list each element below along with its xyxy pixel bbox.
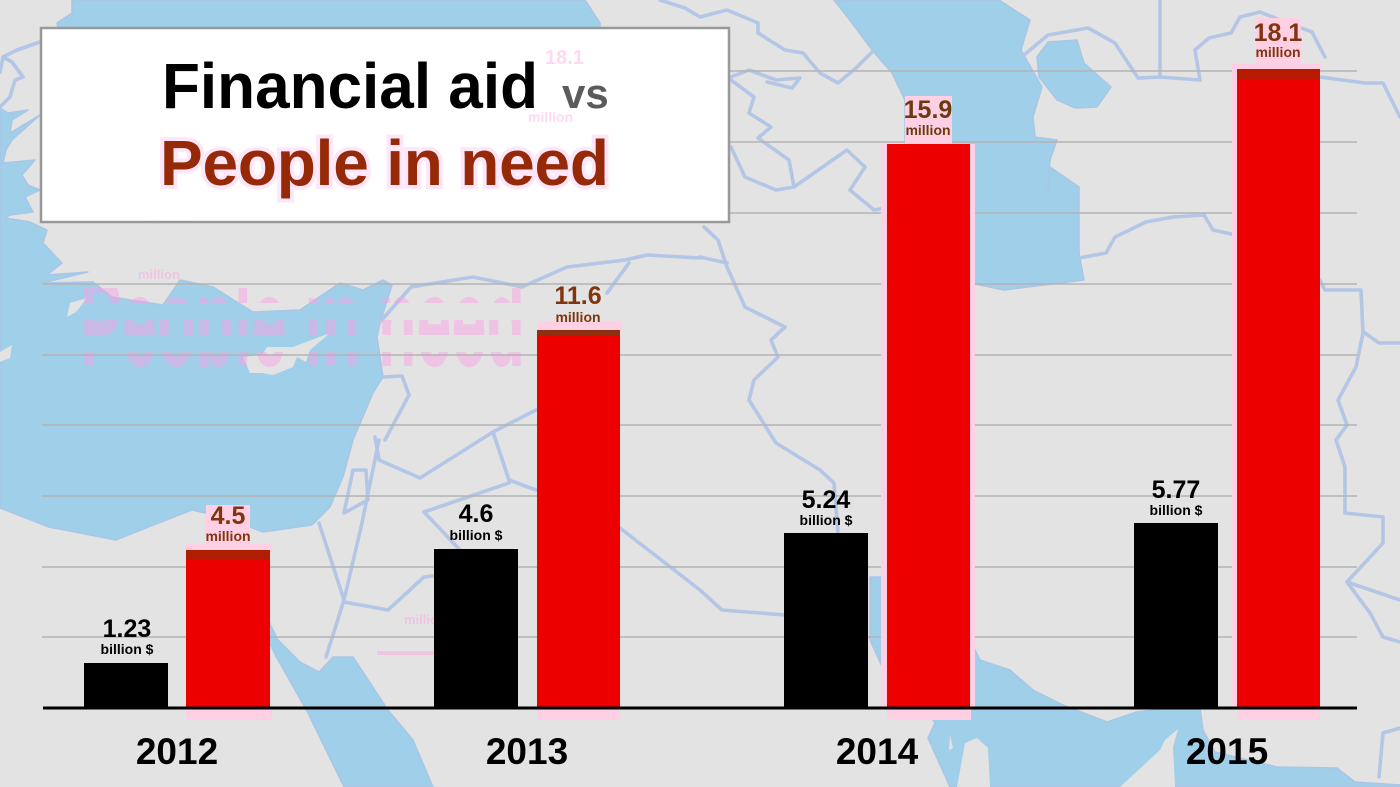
land islands and peninsulas: [0, 298, 1178, 787]
label: 2012 need: [205, 502, 251, 544]
label: 2015 need: million: [1255, 44, 1301, 60]
label: 2015 need: 18.1: [1254, 19, 1302, 47]
label: 2013 need: 11.6: [554, 282, 602, 310]
label: 2013 aid: [450, 500, 503, 543]
grid lines: [42, 71, 1357, 637]
title line: Financial aid: Financial aid: [162, 50, 538, 122]
year labels: 2012: [136, 731, 218, 772]
bar halos: [185, 18, 1321, 720]
label: 2015 aid: billion $: [1150, 502, 1203, 518]
label: 2014 aid: billion $: [800, 512, 853, 528]
compression ghost text: 15.6: [150, 207, 189, 229]
label: 2015 aid: [1150, 476, 1203, 518]
bar: 2013 people in need: [537, 330, 620, 708]
label: 2014 need: 15.9: [904, 96, 952, 124]
label: 2012 need: 4.5: [211, 502, 245, 530]
label: 2013 aid: billion $: [450, 527, 503, 543]
label: 2013 need: [554, 282, 602, 325]
title panel: [41, 28, 729, 222]
year labels: 2014: [836, 731, 919, 772]
label: 2013 aid: 4.6: [459, 500, 493, 528]
bar: 2013 financial aid: [434, 549, 518, 708]
faint ghost figures inside panel: [528, 47, 584, 125]
bar: 2015 people in need: [1237, 69, 1320, 708]
faint ghost figures inside panel: 18.1: [545, 47, 584, 69]
bar: 2012 people in need: [186, 550, 270, 708]
compression ghost text: People in need: [80, 251, 525, 394]
bar: 2012 financial aid: [84, 663, 168, 708]
year labels: [136, 731, 1268, 772]
label: 2012 aid: [101, 615, 154, 657]
label: 2012 aid: 1.23: [103, 615, 151, 643]
bar: 2015 financial aid: [1134, 523, 1218, 708]
label: 2013 need: million: [555, 309, 601, 325]
bar: 2014 financial aid: [784, 533, 868, 708]
label: 2014 need: [904, 96, 952, 138]
label: 2012 aid: billion $: [101, 641, 154, 657]
title word: vs: vs: [562, 70, 609, 117]
compression ghost text: [80, 207, 525, 655]
label: 2015 aid: 5.77: [1152, 476, 1200, 504]
compression ghost text: million: [138, 267, 180, 282]
label: 2014 aid: [800, 486, 853, 528]
label: 2014 need: million: [905, 122, 951, 138]
x axis: [43, 706, 1357, 710]
compression ghost text: million: [404, 612, 446, 627]
faint ghost figures inside panel: million: [528, 109, 573, 125]
bar: 2014 people in need: [887, 144, 970, 708]
title line: People in need: People in need: [160, 127, 609, 199]
label: 2014 aid: 5.24: [802, 486, 850, 514]
year labels: 2013: [486, 731, 568, 772]
label: 2012 need: million: [205, 528, 251, 544]
year labels: 2015: [1186, 731, 1268, 772]
label: 2015 need: [1254, 19, 1302, 60]
